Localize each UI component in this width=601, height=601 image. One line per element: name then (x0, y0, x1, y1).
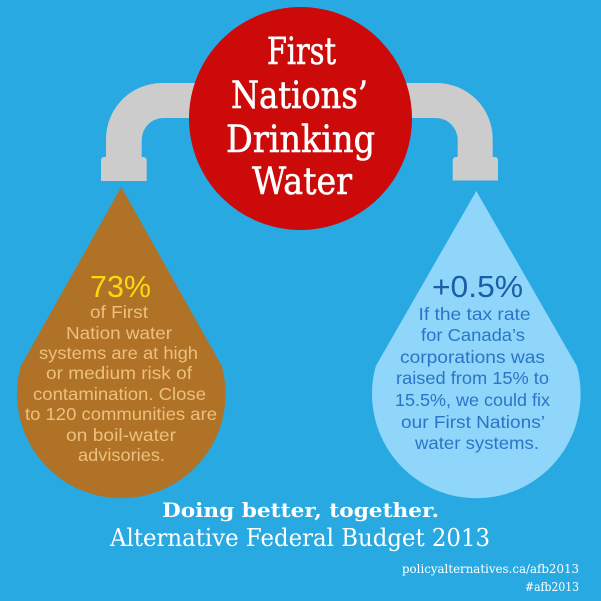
text: tax rate description (395, 304, 550, 453)
icon: left tap pipe (101, 83, 200, 181)
text: tax rate description: raised from 15% to (396, 368, 549, 388)
text: contamination description: on boil-water (66, 425, 176, 445)
panel: contaminated water drop (17, 187, 226, 498)
title: Water (252, 160, 352, 203)
text: contamination description: advisories. (78, 445, 165, 465)
hashtag: #afb2013 (525, 579, 579, 594)
title: First (267, 30, 336, 73)
text: contamination description (25, 302, 217, 465)
text: tax rate description: water systems. (414, 433, 539, 453)
text: contamination description: Nation water (66, 323, 172, 343)
text: tax rate description: corporations was (400, 347, 545, 367)
text: contamination description: systems are at high (39, 343, 198, 363)
icon: right tap pipe (400, 83, 498, 180)
text: tax rate description: If the tax rate (418, 304, 530, 324)
text: contamination description: or medium risk of (46, 363, 192, 383)
title circle (189, 7, 412, 230)
tagline: Doing better, together. (162, 498, 439, 522)
subtitle: Alternative Federal Budget 2013 (109, 524, 490, 552)
text: tax rate description: our First Nations’ (401, 412, 545, 432)
text: contamination description: of First (90, 302, 148, 322)
website link: policyalternatives.ca/afb2013 (402, 561, 579, 576)
text: tax rate description: 15.5%, we could fix (395, 390, 550, 410)
text: contamination description: contamination. Close (33, 384, 206, 404)
panel: clean water drop (372, 191, 581, 498)
title (226, 30, 375, 203)
stat: +0.5%: +0.5% (432, 269, 523, 304)
title: Nations’ (231, 74, 368, 117)
text: contamination description: to 120 communities are (25, 404, 217, 424)
title: Drinking (226, 118, 375, 161)
text: tax rate description: for Canada’s (421, 325, 525, 345)
stat: 73%: 73% (90, 269, 151, 304)
